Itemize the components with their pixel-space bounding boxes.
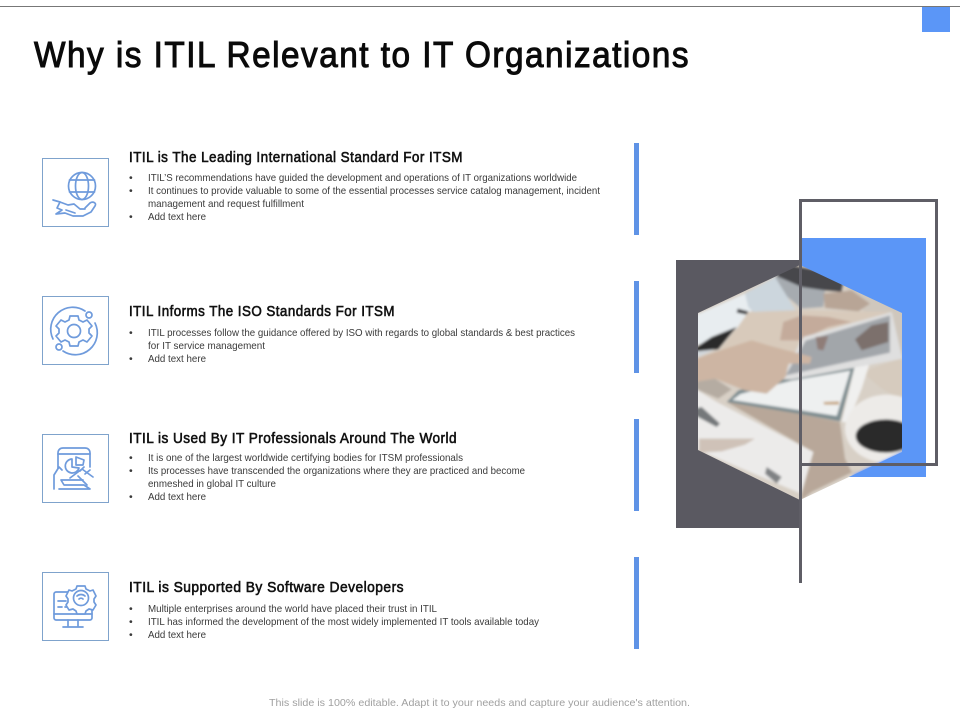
heading: ITIL Informs The ISO Standards For ITSM	[129, 303, 395, 320]
bullet list: Add text here	[148, 491, 206, 503]
bullet list: It is one of the largest worldwide certifying bodies for ITSM professionals	[148, 452, 463, 464]
image composition	[676, 200, 936, 583]
outline frame and vertical line	[800, 200, 936, 583]
icon: monitor with gear	[42, 572, 108, 640]
bullet list: •	[129, 603, 133, 615]
bullet list: •	[129, 452, 133, 464]
bullet list: Add text here	[148, 353, 206, 365]
title: Why is ITIL Relevant to IT Organizations	[34, 34, 690, 75]
accent bar	[634, 281, 639, 373]
bullet list	[129, 172, 600, 223]
bullet list: ITIL processes follow the guidance offered by ISO with regards to global standards & best practices	[148, 327, 575, 339]
heading: ITIL is The Leading International Standard For ITSM	[129, 149, 463, 166]
corner accent square	[922, 7, 950, 32]
bullet list: Multiple enterprises around the world have placed their trust in ITIL	[148, 603, 437, 615]
bullet list: •	[129, 327, 133, 339]
bullet list: for IT service management	[148, 340, 265, 352]
bullet list: ITIL has informed the development of the most widely implemented IT tools available today	[148, 616, 540, 628]
bullet list	[129, 603, 540, 641]
bullet list: Its processes have transcended the organizations where they are practiced and become	[148, 465, 525, 477]
panel: leading international standard	[42, 143, 639, 235]
accent bar	[634, 143, 639, 235]
bullet list: •	[129, 491, 133, 503]
icon: globe in hand	[42, 158, 108, 226]
heading: ITIL is Supported By Software Developers	[129, 579, 404, 596]
panel: IT professionals	[42, 419, 639, 511]
bullet list: It continues to provide valuable to some of the essential processes service catalog management, incident	[148, 185, 600, 197]
bullet list: Add text here	[148, 211, 206, 223]
bullet list: ITIL’S recommendations have guided the development and operations of IT organizations worldwide	[148, 172, 577, 184]
bullet list: •	[129, 629, 133, 641]
accent bar	[634, 557, 639, 649]
footer note: This slide is 100% editable. Adapt it to your needs and capture your audience's attention.	[269, 697, 690, 709]
bullet list	[129, 452, 525, 503]
bullet list: Add text here	[148, 629, 206, 641]
accent bar	[634, 419, 639, 511]
hexagon photo	[698, 266, 902, 500]
bullet list: •	[129, 353, 133, 365]
bullet list: •	[129, 211, 133, 223]
icon: tablet with chart and hand	[42, 434, 108, 502]
bullet list	[129, 327, 575, 365]
bullet list: •	[129, 185, 133, 197]
dark gray block	[676, 260, 802, 528]
panel: ISO standards	[42, 281, 639, 373]
bullet list: management and request fulfillment	[148, 198, 304, 210]
blue block	[802, 238, 926, 477]
icon: gear with orbit	[42, 296, 108, 364]
heading: ITIL is Used By IT Professionals Around The World	[129, 430, 457, 447]
bullet list: •	[129, 616, 133, 628]
panel: software developers	[42, 557, 639, 649]
bullet list: enmeshed in global IT culture	[148, 478, 276, 490]
bullet list: •	[129, 172, 133, 184]
bullet list: •	[129, 465, 133, 477]
